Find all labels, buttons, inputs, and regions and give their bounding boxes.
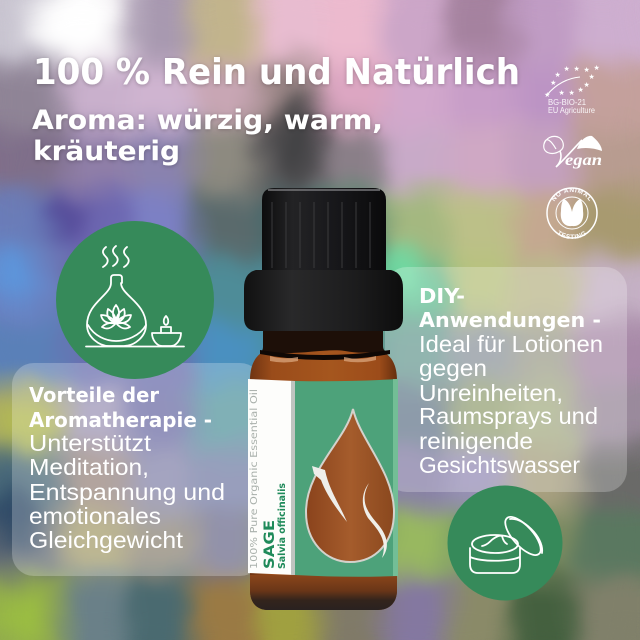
text block: DIY-Anwendungen: Unreinheiten,	[419, 380, 563, 406]
text block: DIY-Anwendungen: Gesichtswasser	[419, 452, 580, 478]
cap	[262, 188, 386, 270]
icon: EU organic leaf: ★	[544, 91, 550, 99]
icon: EU organic leaf: ★	[569, 89, 575, 97]
icon: EU organic leaf: ★	[550, 79, 556, 87]
label text: SAGE	[262, 520, 278, 569]
panel: DIY-Anwendungen	[385, 267, 627, 492]
panel: Aromatherapie	[12, 363, 262, 576]
icon: EU organic leaf: ★	[594, 64, 600, 72]
text block: Vorteile der Aromatherapie: Unterstützt	[29, 430, 152, 456]
icon: EU organic leaf: BG-BIO-21	[548, 98, 587, 107]
icon: no animal testing	[546, 187, 598, 239]
text block: Vorteile der Aromatherapie: Entspannung und	[29, 479, 225, 505]
icon: diffuser circle	[56, 221, 214, 379]
label text: Salvia officinalis	[277, 483, 288, 569]
label: green	[295, 379, 398, 577]
text block: DIY-Anwendungen: reinigende	[419, 428, 533, 454]
text block: Vorteile der Aromatherapie: emotionales	[29, 503, 161, 529]
icon: EU organic leaf: EU Agriculture	[548, 106, 595, 115]
icon: EU organic leaf: ★	[578, 86, 584, 94]
icon: EU organic leaf: ★	[584, 66, 590, 74]
subtitle	[32, 105, 383, 167]
icon: oil drop	[306, 409, 394, 562]
text block: DIY-Anwendungen: DIY-	[419, 284, 465, 308]
text block: DIY-Anwendungen: Anwendungen -	[419, 308, 601, 332]
text block: Vorteile der Aromatherapie: Vorteile der	[29, 383, 159, 407]
label text: 100% Pure Organic Essential Oil	[249, 389, 260, 569]
text block: DIY-Anwendungen: Ideal für Lotionen	[419, 331, 603, 357]
title: 100 % Rein und Natürlich	[33, 52, 520, 93]
icon: EU organic leaf: ★	[559, 89, 565, 97]
subtitle: kräuterig	[33, 136, 180, 167]
icon: EU organic leaf	[544, 64, 600, 115]
icon: EU organic leaf: ★	[584, 81, 590, 89]
label text	[249, 389, 288, 569]
text block: DIY-Anwendungen: Raumsprays und	[419, 403, 598, 429]
icon: cream jar circle	[448, 486, 562, 600]
icon: no animal testing: TESTING	[558, 230, 586, 239]
bottle	[244, 188, 403, 610]
text block: Vorteile der Aromatherapie: Aromatherapie -	[29, 408, 212, 432]
text block: DIY-Anwendungen: gegen	[419, 355, 487, 381]
icon: EU organic leaf: ★	[555, 71, 561, 79]
subtitle: Aroma: würzig, warm,	[32, 105, 383, 136]
label: white strip	[248, 379, 295, 575]
icon: no animal testing: NO ANIMAL	[552, 188, 590, 202]
icon: vegan logo: egan	[565, 152, 602, 169]
icon: EU organic leaf: ★	[589, 73, 595, 81]
text block: DIY-Anwendungen	[419, 284, 603, 478]
text block: Vorteile der Aromatherapie: Meditation,	[29, 454, 149, 480]
bottle glass	[250, 340, 397, 610]
text block: Vorteile der Aromatherapie	[29, 383, 225, 553]
collar	[244, 270, 403, 331]
icon: vegan logo	[544, 136, 602, 169]
text block: Vorteile der Aromatherapie: Gleichgewicht	[29, 527, 184, 553]
icon: EU organic leaf: ★	[574, 65, 580, 73]
icon: EU organic leaf: ★	[564, 65, 570, 73]
